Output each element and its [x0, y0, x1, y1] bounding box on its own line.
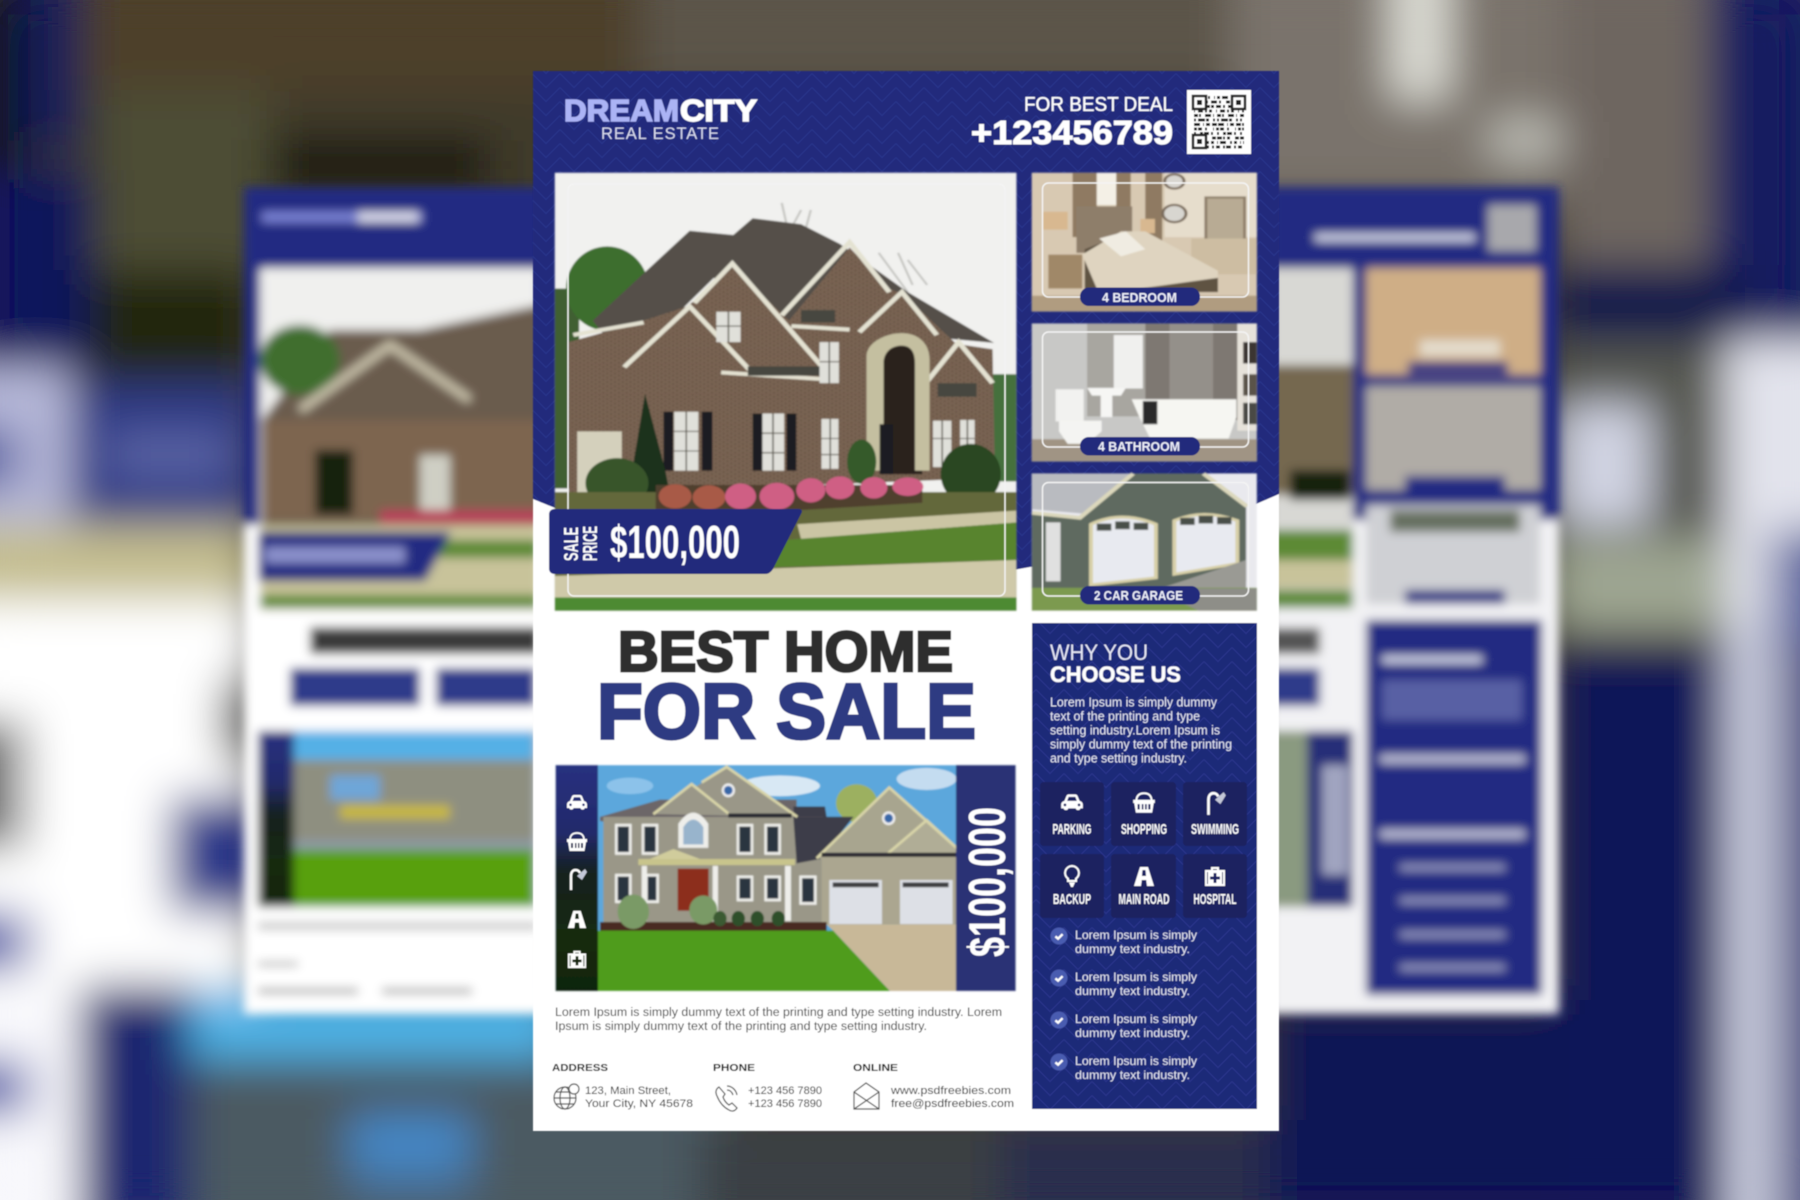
feature tile: backup	[1040, 854, 1104, 918]
price tag	[549, 509, 802, 574]
panel paragraph: simply dummy text of the printing	[1050, 738, 1232, 752]
panel heading	[1050, 640, 1181, 687]
description: Lorem Ipsum is simply dummy text of the printing and type setting industry. Lorem	[555, 1007, 1002, 1019]
feature icon strip	[567, 795, 587, 968]
vertical price: $100,000	[959, 807, 1017, 957]
feature tile: backup: BACKUP	[1053, 891, 1091, 908]
bathroom photo	[1032, 324, 1257, 461]
contact call to action	[971, 94, 1173, 151]
feature tile: parking: PARKING	[1052, 821, 1092, 838]
feature tile: hospital: HOSPITAL	[1194, 891, 1236, 908]
description: Ipsum is simply dummy text of the printing and type setting industry.	[555, 1021, 927, 1033]
feature tile: swimming: SWIMMING	[1191, 821, 1239, 838]
second house photo	[556, 765, 1016, 991]
panel paragraph: Lorem Ipsum is simply dummy	[1050, 696, 1218, 710]
checklist: dummy text industry.	[1075, 984, 1190, 998]
feature tile: hospital	[1183, 854, 1247, 918]
panel paragraph: text of the printing and type	[1050, 710, 1200, 724]
price tag: $100,000	[610, 516, 740, 568]
panel heading: WHY YOU	[1050, 640, 1148, 665]
headline	[597, 620, 976, 755]
bedroom photo	[1032, 173, 1257, 311]
address block	[552, 1062, 693, 1110]
checklist: Lorem Ipsum is simply	[1075, 970, 1197, 984]
address block: Your City, NY 45678	[585, 1098, 693, 1110]
feature tile: shopping	[1111, 782, 1176, 846]
white photo frames	[568, 183, 1248, 596]
panel paragraph	[1050, 696, 1232, 766]
room label: 2 car garage	[1080, 586, 1200, 604]
contact call to action: +123456789	[971, 114, 1173, 151]
feature tile: parking	[1040, 782, 1104, 846]
phone block	[713, 1062, 822, 1111]
phone block: PHONE	[713, 1062, 755, 1074]
checklist: dummy text industry.	[1075, 1068, 1190, 1082]
feature tile: shopping: SHOPPING	[1121, 821, 1167, 838]
phone block: +123 456 7890	[748, 1085, 822, 1097]
price tag: PRICE	[580, 526, 602, 561]
icon: phone	[716, 1086, 737, 1111]
feature tile: main road	[1111, 854, 1176, 918]
checklist: Lorem Ipsum is simply	[1075, 1012, 1197, 1026]
centre flyer	[533, 71, 1279, 1131]
panel paragraph: setting industry.Lorem Ipsum is	[1050, 724, 1220, 738]
panel: why choose us	[1032, 623, 1257, 1109]
online block: www.psdfreebies.com	[890, 1085, 1011, 1097]
icon: envelope	[854, 1083, 879, 1109]
room label: 4 bedroom	[1080, 288, 1200, 306]
panel heading: CHOOSE US	[1050, 662, 1181, 687]
headline: FOR SALE	[597, 667, 976, 755]
feature tile: swimming	[1183, 782, 1247, 846]
headline: BEST HOME	[618, 620, 953, 684]
address block: 123, Main Street,	[585, 1085, 671, 1097]
checklist: Lorem Ipsum is simply	[1075, 1054, 1197, 1068]
logo: DREAM	[564, 93, 679, 128]
contact call to action: FOR BEST DEAL	[1024, 94, 1173, 116]
header blue shape	[533, 71, 1279, 579]
icon: globe	[554, 1084, 579, 1109]
address block: ADDRESS	[552, 1062, 608, 1074]
online block: free@psdfreebies.com	[891, 1098, 1014, 1110]
room label: 2 car garage: 2 CAR GARAGE	[1094, 589, 1183, 603]
blurred right flyer	[1270, 187, 1559, 1014]
online block	[853, 1062, 1014, 1110]
logo: CITY	[680, 93, 757, 128]
online block: ONLINE	[853, 1062, 898, 1074]
logo	[564, 93, 757, 143]
checklist: Lorem Ipsum is simply	[1075, 928, 1197, 942]
room label: 4 bathroom	[1080, 437, 1200, 456]
room label: 4 bedroom: 4 BEDROOM	[1102, 291, 1177, 305]
checklist	[1050, 927, 1197, 1082]
blurred left flyer	[244, 187, 544, 1014]
panel paragraph: and type setting industry.	[1050, 752, 1187, 766]
checklist: dummy text industry.	[1075, 942, 1190, 956]
main house photo	[555, 173, 1016, 611]
room label: 4 bathroom: 4 BATHROOM	[1098, 440, 1180, 454]
price tag: SALE	[561, 527, 583, 561]
description	[555, 1007, 1002, 1033]
logo: REAL ESTATE	[601, 125, 719, 143]
checklist: dummy text industry.	[1075, 1026, 1190, 1040]
feature tile: main road: MAIN ROAD	[1118, 891, 1170, 908]
QR code	[1187, 90, 1251, 154]
phone block: +123 456 7890	[748, 1098, 822, 1110]
garage photo	[1032, 474, 1257, 611]
